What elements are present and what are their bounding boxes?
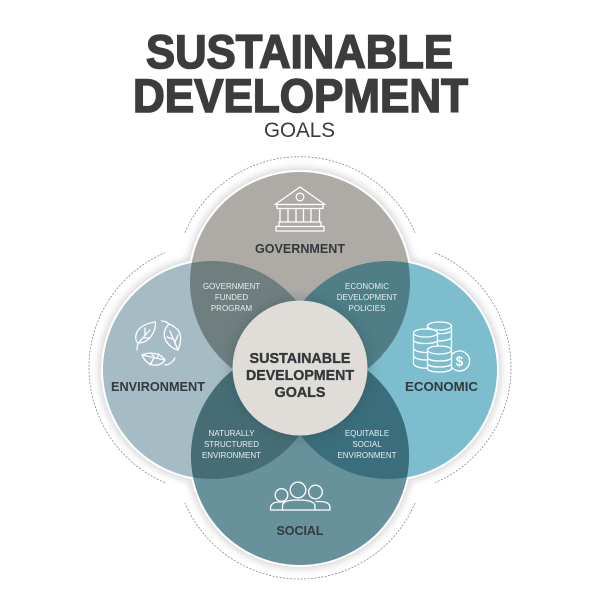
text: economic development policies <box>337 282 397 313</box>
label: social: SOCIAL <box>276 524 324 538</box>
text: government funded program: PROGRAM <box>211 304 252 313</box>
center label: DEVELOPMENT <box>246 368 354 384</box>
title: GOALS <box>264 119 335 142</box>
overlap: environment and social <box>191 370 299 479</box>
text: economic development policies: POLICIES <box>349 304 385 313</box>
overlap: government and environment <box>190 261 296 369</box>
title <box>133 25 468 142</box>
center shadow <box>230 299 370 439</box>
text: naturally structured environment: NATURALLY <box>209 429 255 438</box>
center circle <box>232 300 368 436</box>
dashed outer outline <box>89 157 511 579</box>
text: equitable social environment <box>337 429 397 460</box>
circle: government <box>190 172 410 392</box>
text: economic development policies: DEVELOPMENT <box>337 293 397 302</box>
icon: coins and dollar <box>414 322 470 372</box>
text: naturally structured environment <box>202 429 261 460</box>
icon: recycling leaves <box>136 321 181 365</box>
label: economic: ECONOMIC <box>405 380 478 394</box>
title: SUSTAINABLE <box>146 25 453 78</box>
text: equitable social environment: ENVIRONMENT <box>337 451 397 460</box>
circle: social <box>191 347 409 565</box>
text: government funded program: FUNDED <box>215 293 248 302</box>
label: government: GOVERNMENT <box>255 242 345 256</box>
title: DEVELOPMENT <box>133 69 468 122</box>
overlap: economic and social <box>301 370 409 479</box>
center label: GOALS <box>275 385 325 401</box>
text: economic development policies: ECONOMIC <box>345 282 389 291</box>
text: equitable social environment: SOCIAL <box>352 440 382 449</box>
icon: government building <box>275 187 325 231</box>
center label: SUSTAINABLE <box>250 351 350 367</box>
text: government funded program <box>203 282 260 313</box>
text: naturally structured environment: ENVIRONMENT <box>202 451 261 460</box>
text: naturally structured environment: STRUCTURED <box>204 440 259 449</box>
text: government funded program: GOVERNMENT <box>203 282 260 291</box>
text: equitable social environment: EQUITABLE <box>345 429 389 438</box>
label: environment: ENVIRONMENT <box>111 380 205 394</box>
circle: environment <box>103 261 321 479</box>
overlap: government and economic <box>304 261 410 369</box>
circle: economic <box>279 261 497 479</box>
icon: coins and dollar: $ <box>456 354 464 369</box>
soft shadow halo <box>98 167 502 570</box>
center label <box>246 351 354 401</box>
white rim <box>101 170 499 567</box>
icon: people group <box>270 482 330 510</box>
